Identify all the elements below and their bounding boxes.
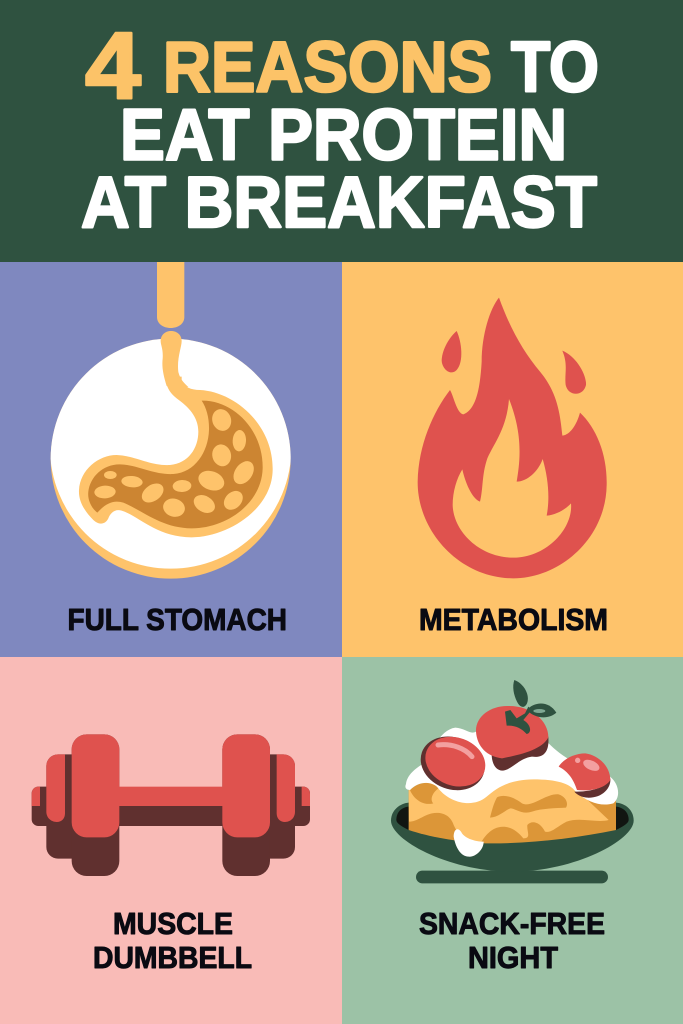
label: snack-free night: NIGHT: [468, 940, 558, 975]
title line 1: 4: [85, 14, 141, 120]
label: snack-free night: SNACK-FREE: [419, 906, 605, 941]
icon: stomach: [50, 262, 291, 579]
label: muscle dumbbell: [93, 906, 252, 975]
title line 1: REASONS: [163, 28, 492, 108]
panel: muscle dumbbell: [0, 657, 342, 1024]
title line 3: AT BREAKFAST: [81, 163, 597, 243]
label: full stomach: FULL STOMACH: [68, 602, 287, 637]
bowl: [391, 803, 634, 872]
title line 1: TO: [511, 28, 599, 108]
tomato centre: [476, 706, 548, 771]
title banner: [0, 0, 683, 262]
toast and cheese: [409, 760, 616, 843]
panel: full stomach: [0, 262, 342, 657]
icon: dumbbell: [32, 734, 310, 876]
label: muscle dumbbell: DUMBBELL: [93, 940, 252, 975]
icon: flame: [418, 298, 607, 578]
icon: breakfast bowl: [391, 680, 634, 883]
label: muscle dumbbell: MUSCLE: [113, 906, 233, 941]
panel: metabolism: [342, 262, 683, 657]
label: snack-free night: [419, 906, 605, 975]
bowl stand: [416, 871, 608, 883]
title line 1: [85, 14, 599, 120]
title line 2: EAT PROTEIN: [120, 96, 567, 176]
tomato right: [559, 753, 610, 798]
panel: snack-free night: [342, 657, 683, 1024]
cream: [405, 728, 618, 857]
label: metabolism: METABOLISM: [419, 602, 608, 637]
tomato leaves: [505, 680, 556, 734]
tomato left: [413, 728, 492, 799]
